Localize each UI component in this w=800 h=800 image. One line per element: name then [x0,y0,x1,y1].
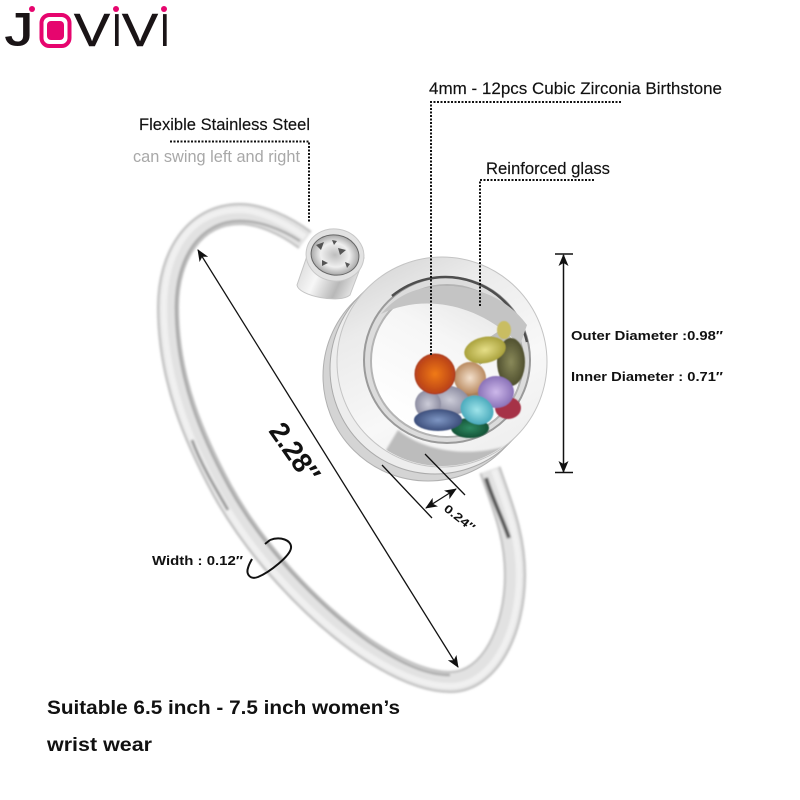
bangle tube [164,210,519,686]
leader: birthstone [431,102,621,355]
label: Inner Diameter: Inner Diameter : 0.71″ [571,370,723,384]
label: 2.28: 2.28″ [263,417,326,489]
logo: Jovivi: V [74,4,110,56]
dimension: tube width ring [247,538,291,578]
logo: Jovivi: J [5,4,33,55]
leader: reinforced glass [480,180,594,307]
logo: Jovivi: V [122,4,158,56]
birthstone gems [414,321,525,438]
dimension: bangle diameter arrow [198,250,458,667]
label: 0.24: 0.24″ [441,503,477,535]
label: Cubic Zirconia Birthstone: 4mm - 12pcs Cubic Zirconia Birthstone [429,79,722,98]
dimension: locket diameter arrow [555,254,573,472]
label: Width: Width : 0.12″ [152,554,243,568]
note: wrist size line 1: Suitable 6.5 inch - 7.5 inch women’s [47,698,400,719]
dimension: locket thickness [382,454,465,518]
label: Reinforced glass: Reinforced glass [486,159,610,178]
leader: stainless steel [170,142,309,222]
label: Flexible Stainless Steel: Flexible Stainless Steel [139,115,310,134]
logo: Jovivi [5,0,171,59]
label: can swing left and right: can swing left and right [133,147,300,166]
round locket [323,257,560,490]
clear crystal end cap [297,224,368,299]
note: wrist size line 2: wrist wear [46,735,153,756]
label: Outer Diameter: Outer Diameter :0.98″ [571,329,723,343]
